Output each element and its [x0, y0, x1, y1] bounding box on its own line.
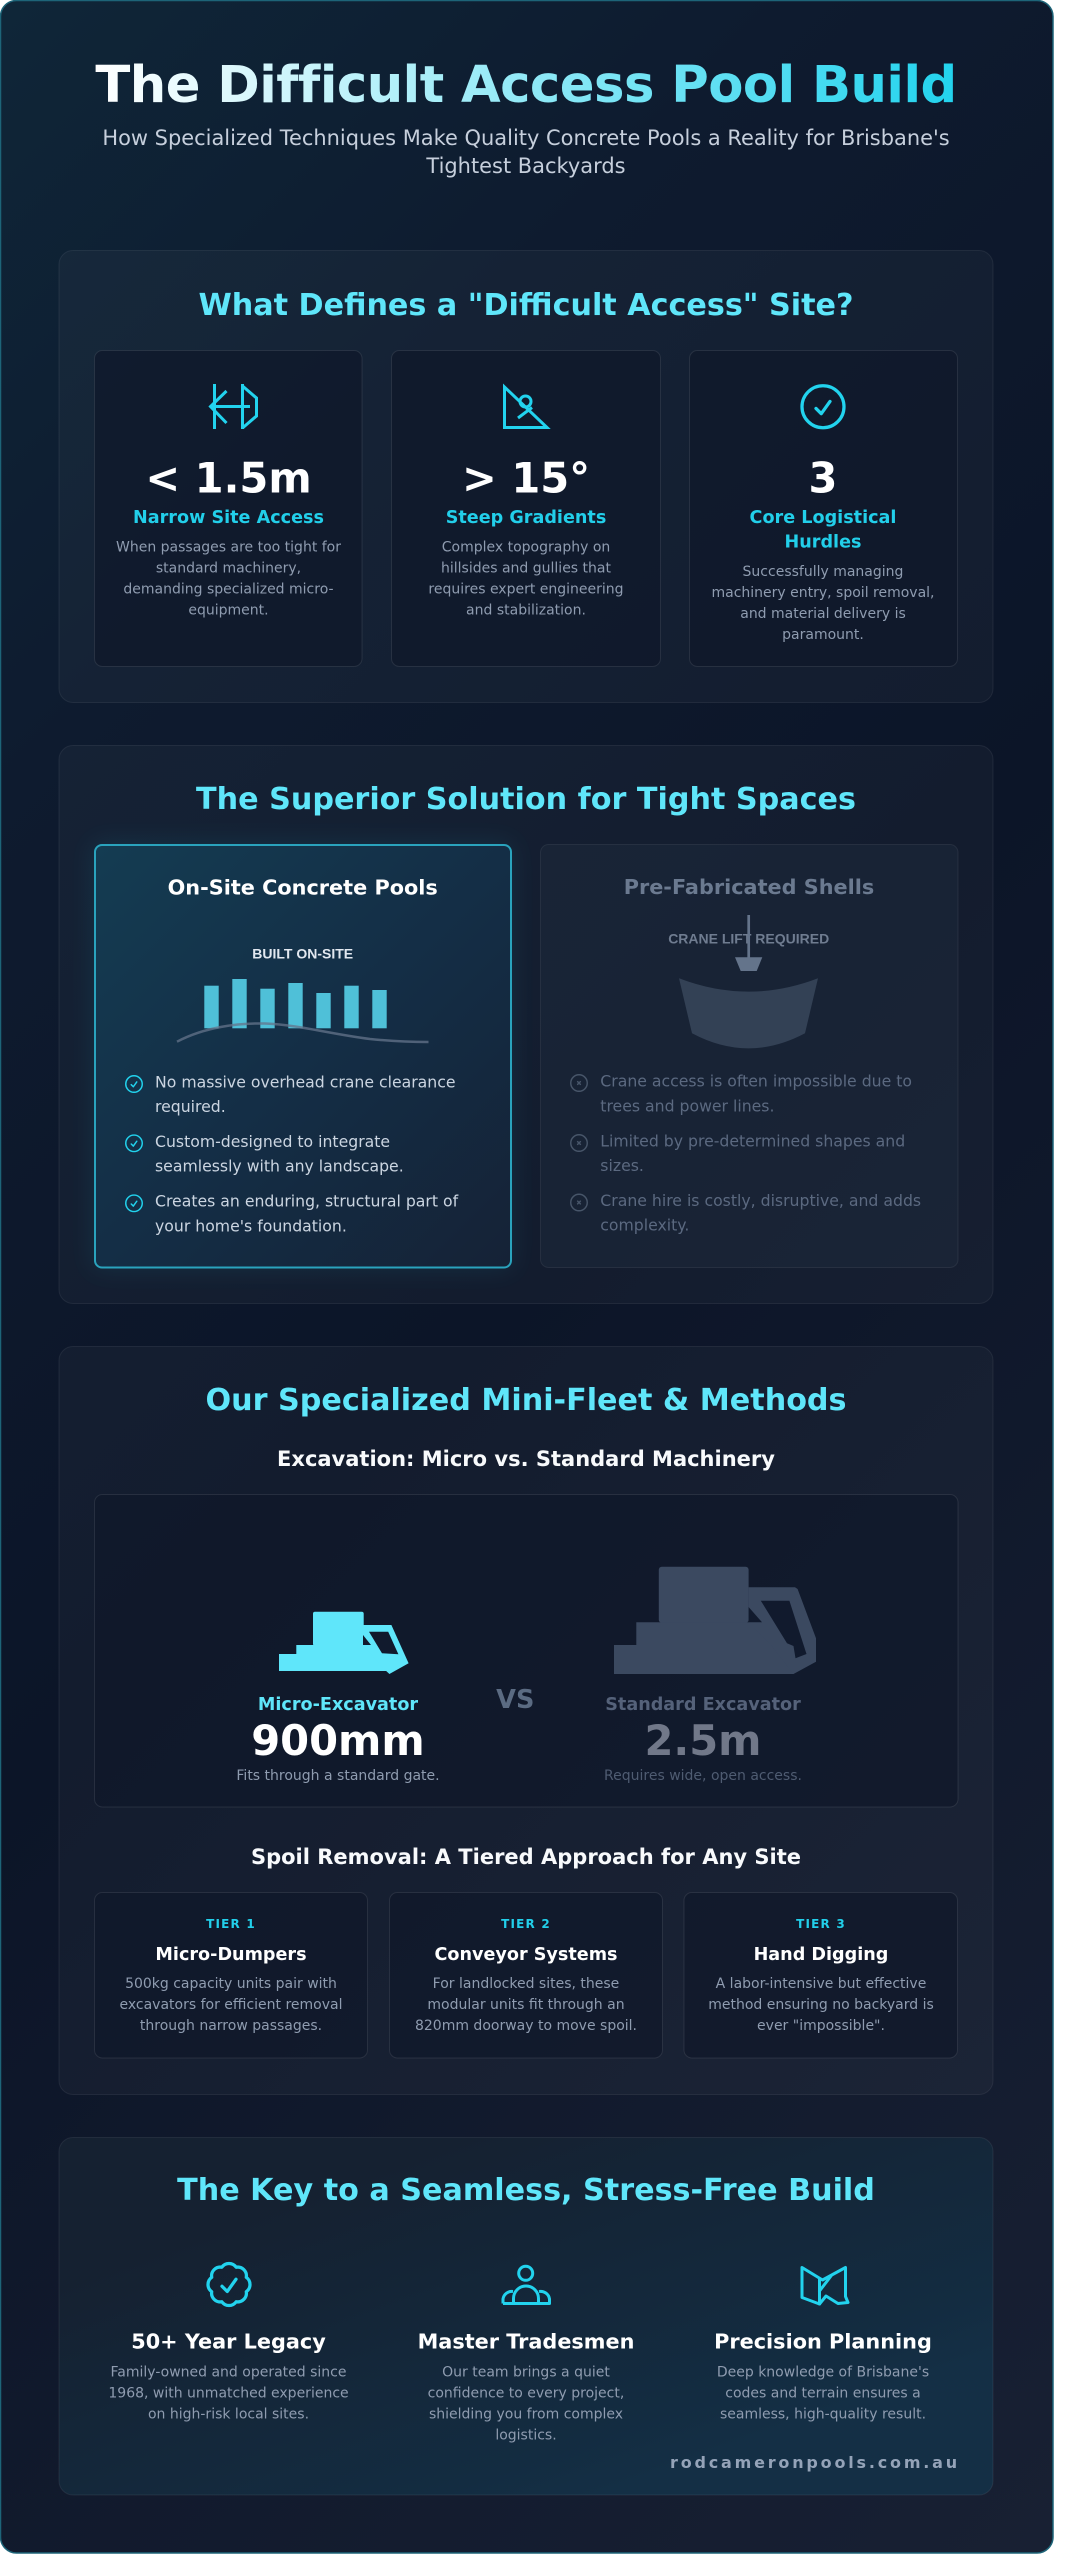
- card: narrow site access: [94, 350, 362, 666]
- column: 50+ year legacy: 50+ Year Legacy: [131, 2329, 326, 2353]
- description: standard machinery,: [156, 561, 301, 577]
- icon: set square gradient: [504, 387, 547, 428]
- drawback list: [571, 1072, 921, 1235]
- label: Narrow Site Access: [133, 508, 324, 528]
- text: micro excavator: [236, 1695, 440, 1784]
- drawback 2: sizes.: [600, 1156, 644, 1175]
- drawback 3: [571, 1191, 921, 1235]
- benefit 3: [126, 1192, 459, 1235]
- text: standard excavator: Standard Excavator: [605, 1695, 801, 1715]
- column: precision planning: seamless, high-quality result.: [720, 2407, 926, 2423]
- label: Core Logistical: [750, 508, 896, 528]
- card: tier 3: Hand Digging: [754, 1945, 888, 1965]
- card: tier 1: [94, 1892, 368, 2058]
- column: 50+ year legacy: on high-risk local sites.: [148, 2407, 309, 2423]
- description: and material delivery is: [740, 606, 906, 622]
- description: requires expert engineering: [428, 582, 624, 598]
- description: and stabilization.: [466, 603, 586, 619]
- column: master tradesmen: [418, 2266, 634, 2444]
- benefit 1: No massive overhead crane clearance: [155, 1072, 456, 1091]
- subtitle: How Specialized Techniques Make Quality Concrete Pools a Reality for Brisbane's: [102, 126, 950, 150]
- panel: what defines a difficult access site: [59, 250, 993, 702]
- column: precision planning: Deep knowledge of Brisbane's: [717, 2365, 929, 2381]
- card: tier 3: method ensuring no backyard is: [708, 1997, 934, 2013]
- panel: specialized mini-fleet and methods: [59, 1346, 993, 2094]
- benefit 2: seamlessly with any landscape.: [155, 1157, 404, 1176]
- icon: narrow passage arrows: [210, 384, 256, 429]
- column: precision planning: codes and terrain ensures a: [725, 2386, 921, 2402]
- card: core logistical hurdles: [690, 350, 958, 666]
- benefit 1: [126, 1072, 455, 1116]
- illustration: built on-site: BUILT ON-SITE: [252, 945, 353, 961]
- heading: On-Site Concrete Pools: [168, 875, 438, 899]
- subheading: excavation: Excavation: Micro vs. Standard Machinery: [277, 1447, 775, 1471]
- card: tier 2: 820mm doorway to move spoil.: [415, 2018, 637, 2034]
- description: Successfully managing: [743, 564, 903, 580]
- text: micro excavator: Fits through a standard gate.: [236, 1768, 440, 1784]
- icon: badge check: [208, 2263, 250, 2305]
- column: master tradesmen: logistics.: [495, 2428, 557, 2444]
- card: tier 2: TIER 2: [501, 1917, 551, 1931]
- subheading: spoil removal: Spoil Removal: A Tiered Approach for Any Site: [251, 1845, 801, 1869]
- subtitle: Tightest Backyards: [425, 154, 626, 178]
- benefit 2: [126, 1132, 404, 1176]
- stat: < 1.5m: [145, 454, 312, 503]
- label: Steep Gradients: [446, 508, 606, 528]
- benefit 3: Creates an enduring, structural part of: [155, 1192, 459, 1211]
- card: tier 1: excavators for efficient removal: [120, 1997, 342, 2013]
- description: demanding specialized micro-: [123, 582, 334, 598]
- stat: 3: [809, 454, 837, 503]
- illustration: crane lift: CRANE LIFT REQUIRED: [668, 930, 829, 946]
- drawback 3: complexity.: [600, 1216, 689, 1235]
- heading: section 1: What Defines a "Difficult Access" Site?: [198, 288, 854, 323]
- benefit list: [126, 1072, 459, 1235]
- description: machinery entry, spoil removal,: [711, 585, 935, 601]
- description: [428, 540, 624, 619]
- drawback 2: Limited by pre-determined shapes and: [600, 1131, 905, 1150]
- card: pre-fabricated shells: [540, 844, 958, 1268]
- heading: section 3: Our Specialized Mini-Fleet & Methods: [205, 1383, 847, 1418]
- drawback 1: trees and power lines.: [600, 1096, 774, 1115]
- stat: > 15°: [462, 454, 590, 503]
- column: master tradesmen: Master Tradesmen: [418, 2329, 634, 2353]
- icon: micro excavator: [279, 1612, 409, 1674]
- card: tier 1: 500kg capacity units pair with: [125, 1976, 337, 1992]
- icon: team: [503, 2266, 550, 2304]
- label: Hurdles: [785, 533, 861, 553]
- text: standard excavator: [604, 1695, 802, 1784]
- description: paramount.: [782, 627, 864, 643]
- card: tier 2: For landlocked sites, these: [433, 1976, 619, 1992]
- subtitle: [102, 126, 950, 178]
- column: precision planning: Precision Planning: [714, 2329, 932, 2353]
- panel: the key to a seamless build: [59, 2138, 993, 2495]
- title: The Difficult Access Pool Build: [95, 55, 957, 115]
- description: When passages are too tight for: [116, 540, 341, 556]
- heading: section 2: The Superior Solution for Tight Spaces: [196, 782, 856, 817]
- card: on-site concrete pools: [92, 842, 513, 1270]
- text: standard excavator: 2.5m: [644, 1716, 762, 1765]
- card: tier 2: [390, 1892, 662, 2058]
- drawback 1: [571, 1072, 912, 1115]
- header: [95, 55, 957, 178]
- icon: standard excavator: [614, 1567, 816, 1674]
- column: master tradesmen: confidence to every project,: [428, 2386, 624, 2402]
- vs label: VS: [496, 1685, 534, 1715]
- heading: section 4: The Key to a Seamless, Stress-Free Build: [177, 2173, 875, 2208]
- drawback 1: Crane access is often impossible due to: [600, 1072, 912, 1091]
- card: tier 3: ever "impossible".: [757, 2018, 885, 2034]
- text: micro excavator: 900mm: [251, 1716, 425, 1765]
- description: [116, 540, 341, 619]
- label: [750, 508, 896, 553]
- benefit 2: Custom-designed to integrate: [155, 1132, 390, 1151]
- description: [711, 564, 935, 643]
- drawback 3: Crane hire is costly, disruptive, and adds: [600, 1191, 921, 1210]
- card: tier 1: TIER 1: [206, 1917, 256, 1931]
- card: tier 2: Conveyor Systems: [434, 1945, 618, 1965]
- card: tier 3: [684, 1892, 958, 2058]
- column: 50+ year legacy: Family-owned and operated since: [111, 2365, 346, 2381]
- heading: Pre-Fabricated Shells: [624, 875, 874, 899]
- website link: rodcameronpools.com.au: [670, 2453, 960, 2472]
- description: equipment.: [188, 603, 269, 619]
- card: tier 3: TIER 3: [796, 1917, 846, 1931]
- description: Complex topography on: [442, 540, 610, 556]
- text: standard excavator: Requires wide, open access.: [604, 1768, 802, 1784]
- illustration: crane lift: [668, 915, 829, 1048]
- card: tier 2: modular units fit through an: [427, 1997, 625, 2013]
- card: machine comparison: [94, 1494, 958, 1807]
- card: tier 1: Micro-Dumpers: [155, 1945, 307, 1965]
- benefit 3: your home's foundation.: [155, 1216, 347, 1235]
- illustration: built on-site: [177, 945, 428, 1042]
- drawback 2: [571, 1131, 905, 1175]
- icon: map: [802, 2268, 848, 2304]
- column: 50+ year legacy: 1968, with unmatched experience: [108, 2386, 349, 2402]
- column: master tradesmen: Our team brings a quiet: [442, 2365, 610, 2381]
- panel: the superior solution: [59, 746, 993, 1304]
- description: hillsides and gullies that: [441, 561, 611, 577]
- card: tier 3: A labor-intensive but effective: [716, 1976, 926, 1992]
- card: tier 1: through narrow passages.: [140, 2018, 322, 2034]
- column: master tradesmen: shielding you from complex: [429, 2407, 623, 2423]
- column: 50+ year legacy: [108, 2263, 349, 2423]
- column: precision planning: [714, 2268, 932, 2423]
- text: micro excavator: Micro-Excavator: [258, 1695, 418, 1715]
- card: steep gradients: [392, 350, 660, 666]
- icon: check circle: [802, 386, 844, 428]
- benefit 1: required.: [155, 1097, 226, 1116]
